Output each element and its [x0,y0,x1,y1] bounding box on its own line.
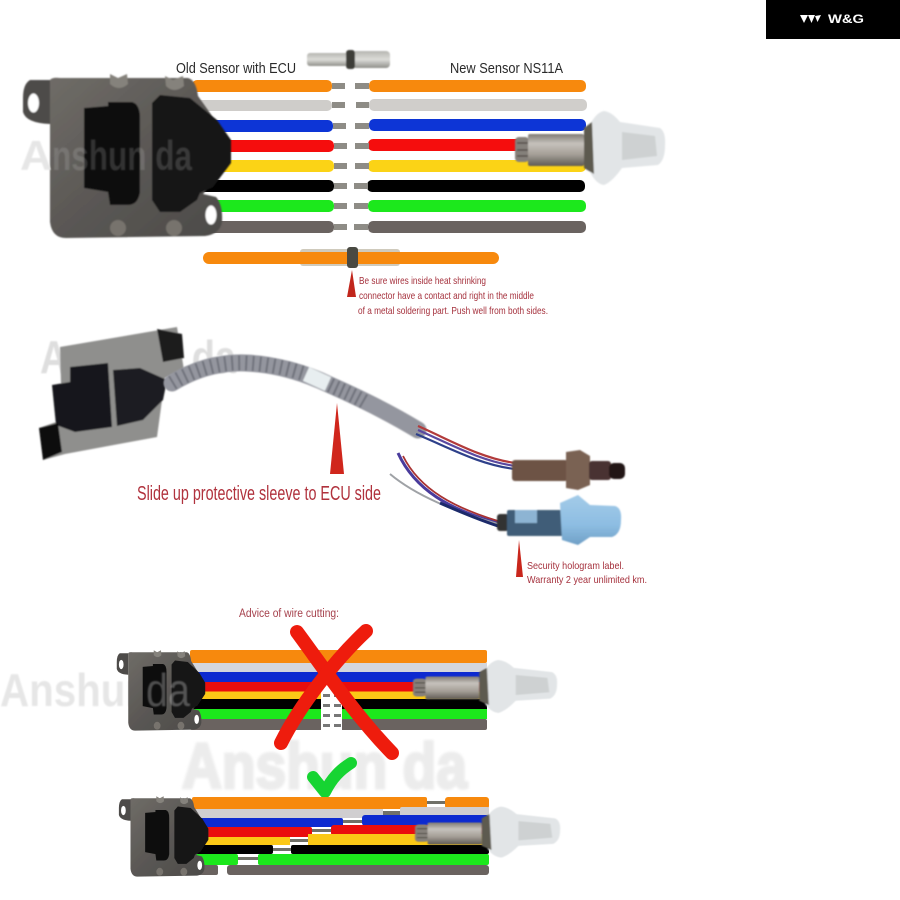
panel: correct staggered cutting example [119,796,560,877]
note: heat shrink instruction [358,275,548,317]
panel: wire splice diagram [20,50,665,317]
note: heat shrink instruction: connector have a contact and right in the middle [359,290,534,302]
wires: new sensor side [367,80,587,233]
wires: bundle cut at same point [190,650,487,731]
icon: green check mark [313,763,351,792]
heat shrink connector [307,50,390,69]
sensor: used brown [512,450,625,490]
watermark: Anshun da top [20,132,192,179]
logo badge: W&G [766,0,900,39]
watermark: da over ECU: da [146,664,190,716]
sensor [415,807,560,858]
note: heat shrink instruction: of a metal soldering part. Push well from both sides. [358,305,548,317]
wires: staggered cuts [192,797,489,875]
watermark: Anshun da top: A [20,132,52,179]
icon: red cross [281,631,392,753]
wire harness sleeve [172,363,418,430]
caption: slide up sleeve: Slide up protective sleeve to ECU side [137,483,381,505]
wires: old sensor side [192,80,334,233]
logo text: W&G [828,12,864,26]
watermark: Anshun da large: Anshun da [182,730,467,802]
note: hologram and warranty: Security hologram label. [527,560,624,572]
watermark: Anshun da lower left: Anshun [0,664,150,716]
sensor: NS11A [515,111,665,185]
wires: to new sensor [390,453,498,526]
ECU unit: photo [39,327,184,460]
watermark: Anshun da top: nshun da [52,132,192,179]
ECU unit: old sensor [23,74,231,238]
icon: logo triangles [800,15,821,23]
caption: advice of wire cutting: Advice of wire cutting: [239,608,339,620]
sensor: new blue cap [497,495,621,545]
heading: old sensor: Old Sensor with ECU [176,61,296,77]
joined orange wire with connector [203,247,499,268]
watermark: Anshun da middle: Anshun da [40,331,236,383]
arrow: sleeve position [330,403,344,474]
arrow: hologram label [516,540,523,577]
ECU unit [117,650,205,731]
sensor [413,660,557,713]
panel: wrong cutting example [0,608,557,753]
panel: protective sleeve photo [39,327,647,586]
note: hologram and warranty: Warranty 2 year unlimited km. [527,574,647,586]
note: heat shrink instruction: Be sure wires inside heat shrinking [359,275,486,287]
wires: to upper sensor [416,426,515,469]
heading: new sensor: New Sensor NS11A [450,61,563,77]
note: hologram and warranty [527,560,647,586]
bare wire stubs [332,83,369,230]
ECU unit [119,796,208,877]
arrow: contact point [347,270,356,297]
